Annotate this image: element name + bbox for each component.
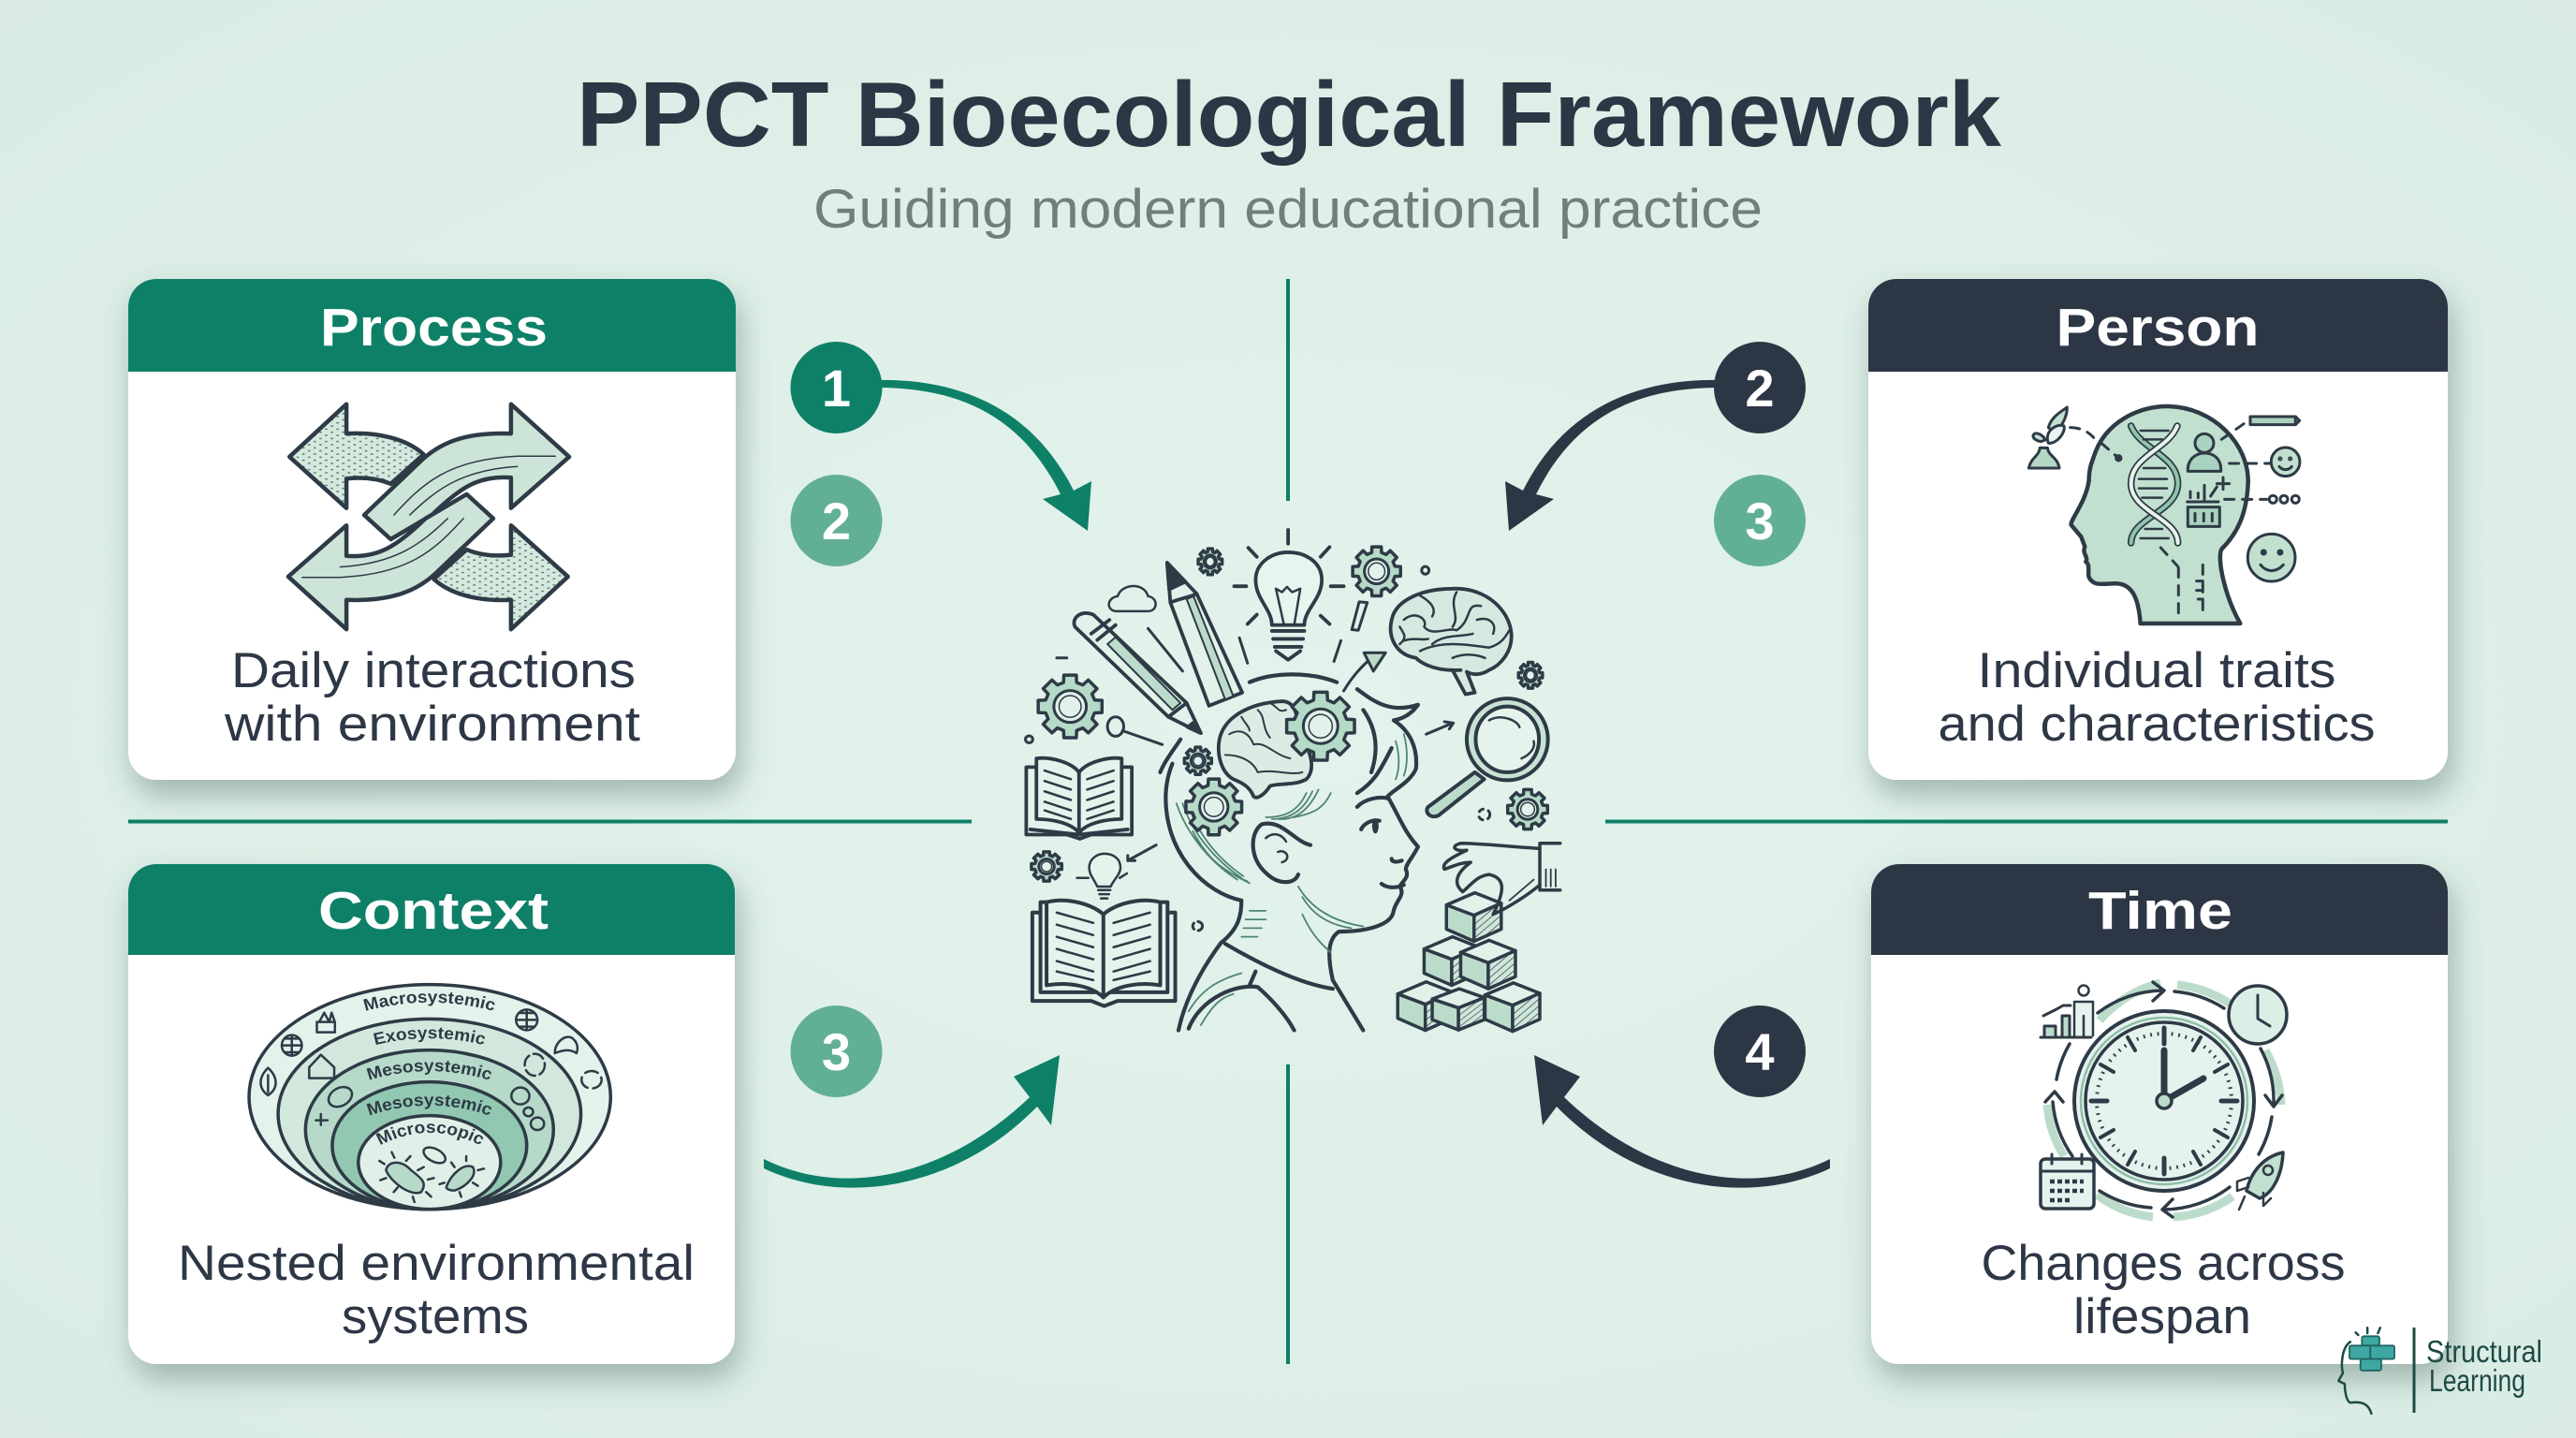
numbered badge 3 light: [1714, 475, 1806, 566]
person description: Individual traits: [1977, 643, 2336, 698]
icon: head with DNA: [2028, 406, 2300, 624]
numbered badge 4 and arrow: 4: [1745, 1022, 1775, 1081]
icon: nested systems bowl: Mesosystemic: [367, 1095, 491, 1116]
context description: Nested environmental: [178, 1236, 695, 1291]
icon: nested systems bowl: Exosystemic: [373, 1028, 485, 1045]
icon: small bulb: [1077, 854, 1127, 899]
panel: context: [116, 863, 756, 1395]
context heading: Context: [318, 881, 549, 941]
numbered badge 3 and arrow: [764, 1005, 1060, 1188]
panel: process: [128, 279, 736, 780]
time description: [1981, 1236, 2346, 1344]
numbered badge 2 light: [790, 475, 882, 566]
quadrant divider lines: [128, 279, 2448, 1364]
logo wordmark: Learning: [2429, 1363, 2525, 1398]
title: PPCT Bioecological Framework: [577, 63, 2002, 166]
icon: nested systems bowl: Microscopic: [376, 1123, 483, 1145]
process description: [224, 643, 640, 752]
icon: brain in head: [1219, 701, 1311, 798]
person heading: Person: [2056, 298, 2260, 358]
logo wordmark: Structural: [2426, 1334, 2542, 1369]
icon: gears: [1032, 547, 1547, 881]
child head and shoulders: [1161, 674, 1418, 1031]
process heading: Process: [320, 298, 548, 358]
process description: Daily interactions: [231, 643, 636, 698]
icon: book lower: [1032, 901, 1176, 1006]
icon: nested systems bowl: Mesosystemic: [367, 1061, 491, 1080]
icon: magnifying glass: [1427, 698, 1548, 816]
context header: [128, 864, 735, 955]
icon: light bulb: [1234, 530, 1344, 660]
icon: nested systems bowl: Macrosystemic: [363, 992, 495, 1011]
icon: hand placing block: [1443, 844, 1560, 915]
numbered badge 2 dark and arrow: 2: [1745, 359, 1775, 418]
numbered badge 1 and arrow: [790, 342, 1091, 531]
process description: with environment: [224, 697, 640, 752]
person header: [1868, 279, 2448, 372]
person description: and characteristics: [1938, 697, 2376, 752]
icon: pencil left: [1074, 613, 1201, 733]
time header: [1871, 864, 2448, 955]
context description: [178, 1236, 695, 1344]
context description: systems: [342, 1289, 529, 1344]
logo wordmark: [2426, 1334, 2542, 1398]
icon: book upper: [1026, 758, 1132, 839]
icon: stacked blocks: [1398, 893, 1540, 1032]
icon: nested systems bowl: [247, 983, 612, 1211]
time heading: Time: [2088, 881, 2232, 941]
person description: [1938, 643, 2376, 752]
subtitle: Guiding modern educational practice: [813, 179, 1763, 240]
central illustration: child with learning icons: [1026, 530, 1560, 1032]
numbered badge 4 and arrow: [1534, 1005, 1830, 1188]
icon: clock with cycle arrows: [2041, 982, 2287, 1217]
numbered badge 2 light: 2: [822, 492, 851, 550]
small arrow heads and dots: [1026, 566, 1490, 931]
icon: interlocking arrows: [288, 404, 569, 629]
icon: cloud: [1109, 586, 1156, 611]
icon: brain upper right: [1391, 589, 1512, 695]
time description: Changes across: [1981, 1236, 2346, 1291]
logo icon: head with blocks: [2338, 1328, 2394, 1414]
icon: gear inside head: [1184, 692, 1354, 835]
process header: [128, 279, 736, 372]
time description: lifespan: [2073, 1289, 2251, 1344]
panel: person: [1868, 279, 2448, 780]
numbered badge 3 and arrow: 3: [822, 1022, 851, 1081]
logo: Structural Learning: [2338, 1328, 2542, 1414]
numbered badge 2 dark and arrow: [1505, 342, 1806, 531]
motion marks: [1057, 602, 1454, 860]
icon: pencil upright: [1167, 563, 1242, 706]
numbered badge 3 light: 3: [1745, 492, 1775, 550]
panel: time: [1871, 864, 2448, 1364]
numbered badge 1 and arrow: 1: [822, 359, 851, 418]
